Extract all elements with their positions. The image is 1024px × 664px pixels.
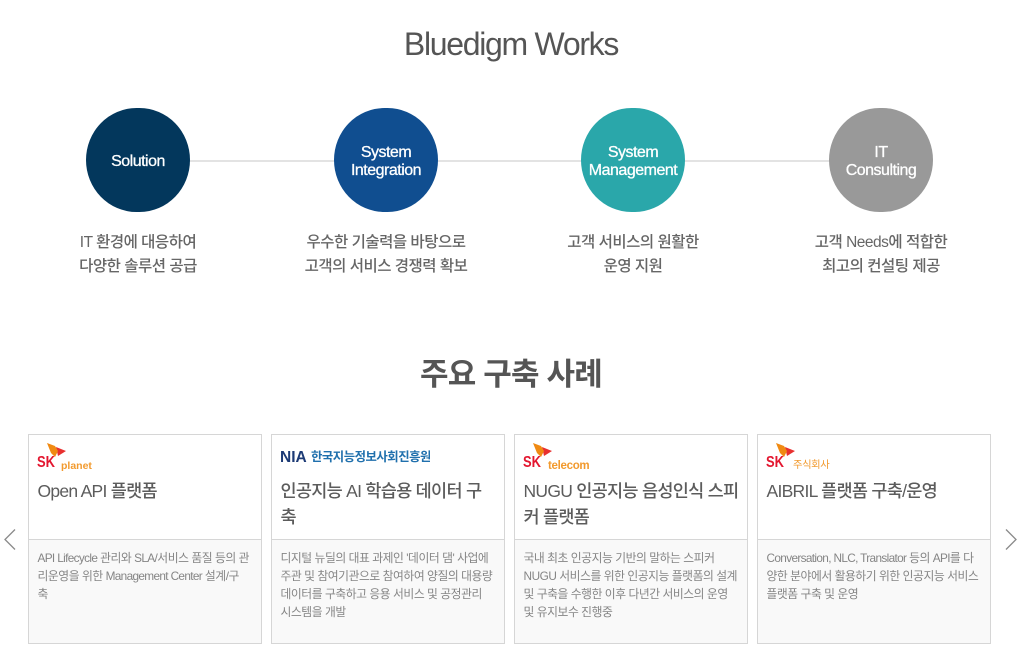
card title: 커 플랫폼 [524,507,589,527]
heading: 주요 구축 사례: 주요 구축 사례 [420,357,602,392]
logo: NIA 한국지능정보사회진흥원 [280,449,430,466]
card text: 리운영을 위한 Management Center 설계/구 [38,569,239,583]
description: IT Consulting: 최고의 컨설팅 제공 [822,258,940,275]
card text: 양한 분야에서 활용하기 위한 인공지능 서비스 [766,569,978,583]
card text: 디지털 뉴딜의 대표 과제인 '데이터 댐' 사업에 [280,551,488,565]
card text [280,551,492,619]
card details [515,539,747,643]
card title: NUGU 인공지능 음성인식 스피 [524,481,738,501]
description: Solution [79,234,197,275]
card details [29,539,261,643]
card: SK 주식회사 [757,434,991,644]
card text [38,551,250,601]
connector line [138,160,881,162]
description: System Management: 고객 서비스의 원활한 [567,234,699,251]
card text: 국내 최초 인공지능 기반의 말하는 스피커 [524,551,714,565]
logo: SK 주식회사 [766,443,830,471]
logo: NIA 한국지능정보사회진흥원: 한국지능정보사회진흥원 [311,449,430,464]
card title: Open API 플랫폼 [38,481,157,501]
card text: 및 유지보수 진행중 [524,605,612,619]
circle: IT Consulting: IT [874,144,888,160]
card text: 축 [38,587,48,601]
description: Solution: 다양한 솔루션 공급 [79,258,197,275]
circle: System Management: System [608,144,658,160]
circle: System Management [581,108,685,212]
card title [280,481,482,527]
description: System Management: 운영 지원 [604,258,662,275]
card details [758,539,990,643]
title: Bluedigm Works: Bluedigm Works [404,26,618,62]
card details [272,539,504,643]
description: System Management [567,234,699,275]
logo: NIA 한국지능정보사회진흥원: NIA [280,449,307,466]
card text: 플랫폼 구축 및 운영 [766,587,858,601]
circle: System Integration: Integration [351,162,421,178]
card title: AIBRIL 플랫폼 구축/운영 [766,481,937,501]
description: Solution: IT 환경에 대응하여 [80,234,196,251]
card text: 및 구축을 수행한 이후 다년간 서비스의 운영 [524,587,728,601]
card text: Conversation, NLC, Translator 등의 API를 다 [766,551,974,565]
description: IT Consulting [815,234,948,275]
card: NIA [271,434,505,644]
card title [524,481,738,527]
card title: 인공지능 AI 학습용 데이터 구 [280,481,481,501]
description: IT Consulting: 고객 Needs에 적합한 [815,234,947,251]
card text [524,551,737,619]
description: System Integration: 고객의 서비스 경쟁력 확보 [305,258,467,275]
card text [766,551,978,601]
description: System Integration: 우수한 기술력을 바탕으로 [306,234,465,251]
circle: Solution [86,108,190,212]
circle: System Integration [334,108,438,212]
card text: API Lifecycle 관리와 SLA/서비스 품질 등의 관 [38,551,249,565]
card text: 시스템을 개발 [280,605,346,619]
card title: 축 [280,507,296,527]
circle: Solution: Solution [111,152,165,170]
circle: IT Consulting [829,108,933,212]
logo: SK planet [37,443,92,472]
circle: System Management: Management [589,162,677,178]
logo: SK telecom: SK [523,454,542,471]
arrow: previous [4,529,16,550]
logo: SK telecom [523,443,589,472]
card text: 주관 및 참여기관으로 참여하여 양질의 대용량 [280,569,492,583]
arrow: next [1006,529,1017,550]
logo: SK planet: SK [37,454,56,471]
card: SK telecom [514,434,748,644]
description: System Integration [305,234,468,275]
logo: SK 주식회사: SK [766,454,785,471]
card text: 데이터를 구축하고 응용 서비스 및 공정관리 [280,587,482,601]
logo: SK telecom: telecom [548,460,589,472]
circle: System Integration: System [361,144,411,160]
card: SK planet [28,434,262,644]
logo: SK 주식회사: 주식회사 [793,459,830,471]
circle: IT Consulting: Consulting [846,162,916,178]
logo: SK planet: planet [61,460,92,472]
card text: NUGU 서비스를 위한 인공지능 플랫폼의 설계 [524,569,737,583]
